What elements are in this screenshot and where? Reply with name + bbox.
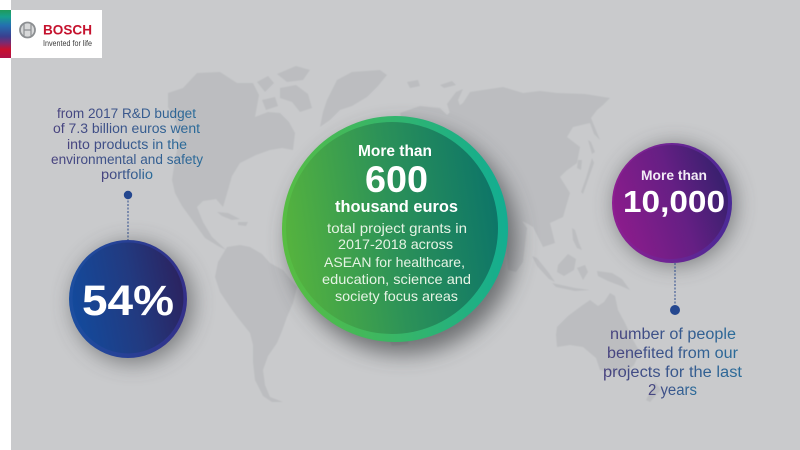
right connector dot [670, 305, 680, 315]
Korea and Japan [577, 140, 595, 194]
center description text [322, 220, 471, 304]
New Zealand [646, 382, 661, 402]
center description text: society focus areas [335, 288, 458, 304]
Borneo [557, 254, 576, 276]
Australia [556, 293, 640, 376]
logo wordmark: BOSCH [43, 22, 92, 38]
left description text: environmental and safety [51, 152, 203, 167]
blue circle inner [72, 242, 184, 354]
Europe [400, 106, 450, 130]
left description text: into products in the [67, 137, 187, 152]
purple circle shadow [615, 145, 735, 265]
green circle inner [286, 122, 498, 334]
icon: Bosch armature [20, 22, 35, 38]
blue circle [69, 240, 187, 358]
right description text [603, 326, 743, 399]
Philippines [572, 228, 582, 250]
right description text: number of people [610, 326, 736, 343]
blue circle shadow [73, 243, 193, 363]
left description text [51, 106, 203, 182]
purple circle [612, 143, 732, 263]
Scandinavia [447, 89, 463, 120]
world map [168, 66, 661, 402]
center description text: total project grants in [327, 220, 467, 236]
South America [215, 245, 297, 402]
value 600: 600 [365, 159, 428, 200]
Eurasia [430, 87, 610, 247]
right description text: benefited from our [607, 345, 738, 362]
Canadian arctic islands [257, 66, 312, 112]
logo tagline: Invented for life [43, 39, 92, 48]
green circle [282, 116, 508, 342]
right description text: projects for the last [603, 364, 743, 381]
right description text: 2 years [648, 382, 697, 399]
left connector dot [124, 191, 132, 199]
more than label: More than [641, 167, 707, 183]
value 10,000: 10,000 [623, 184, 725, 219]
right callout: 10,000 [603, 143, 743, 399]
green circle shadow [289, 126, 517, 354]
left description text: from 2017 R&D budget [57, 106, 196, 121]
left connector dashed line [127, 197, 129, 241]
Sumatra Java [532, 256, 590, 291]
thousand euros label: thousand euros [335, 198, 458, 216]
left description text: portfolio [101, 167, 153, 182]
purple circle inner [614, 145, 728, 259]
right connector dashed line [674, 263, 676, 306]
left description text: of 7.3 billion euros went [53, 121, 200, 136]
left white strip [0, 0, 11, 450]
Sulawesi [577, 265, 588, 280]
logo white background [11, 10, 102, 58]
center callout: 600 thousand euros [282, 116, 517, 354]
more than label: More than [358, 143, 432, 160]
value 54%: 54% [82, 277, 174, 325]
Iceland and Europe north [407, 80, 456, 88]
center description text: ASEAN for healthcare, [324, 254, 465, 270]
Caribbean islands [217, 212, 248, 226]
Bosch logo rainbow stripe [0, 10, 11, 58]
Bosch logo panel [11, 10, 102, 58]
Greenland [320, 70, 387, 127]
Africa tip [385, 330, 410, 346]
North America [168, 72, 295, 250]
left callout: 54% [51, 106, 203, 363]
New Guinea [597, 271, 630, 290]
center description text: education, science and [322, 271, 471, 287]
India and Arabia edge [505, 218, 527, 272]
center description text: 2017-2018 across [338, 236, 453, 252]
